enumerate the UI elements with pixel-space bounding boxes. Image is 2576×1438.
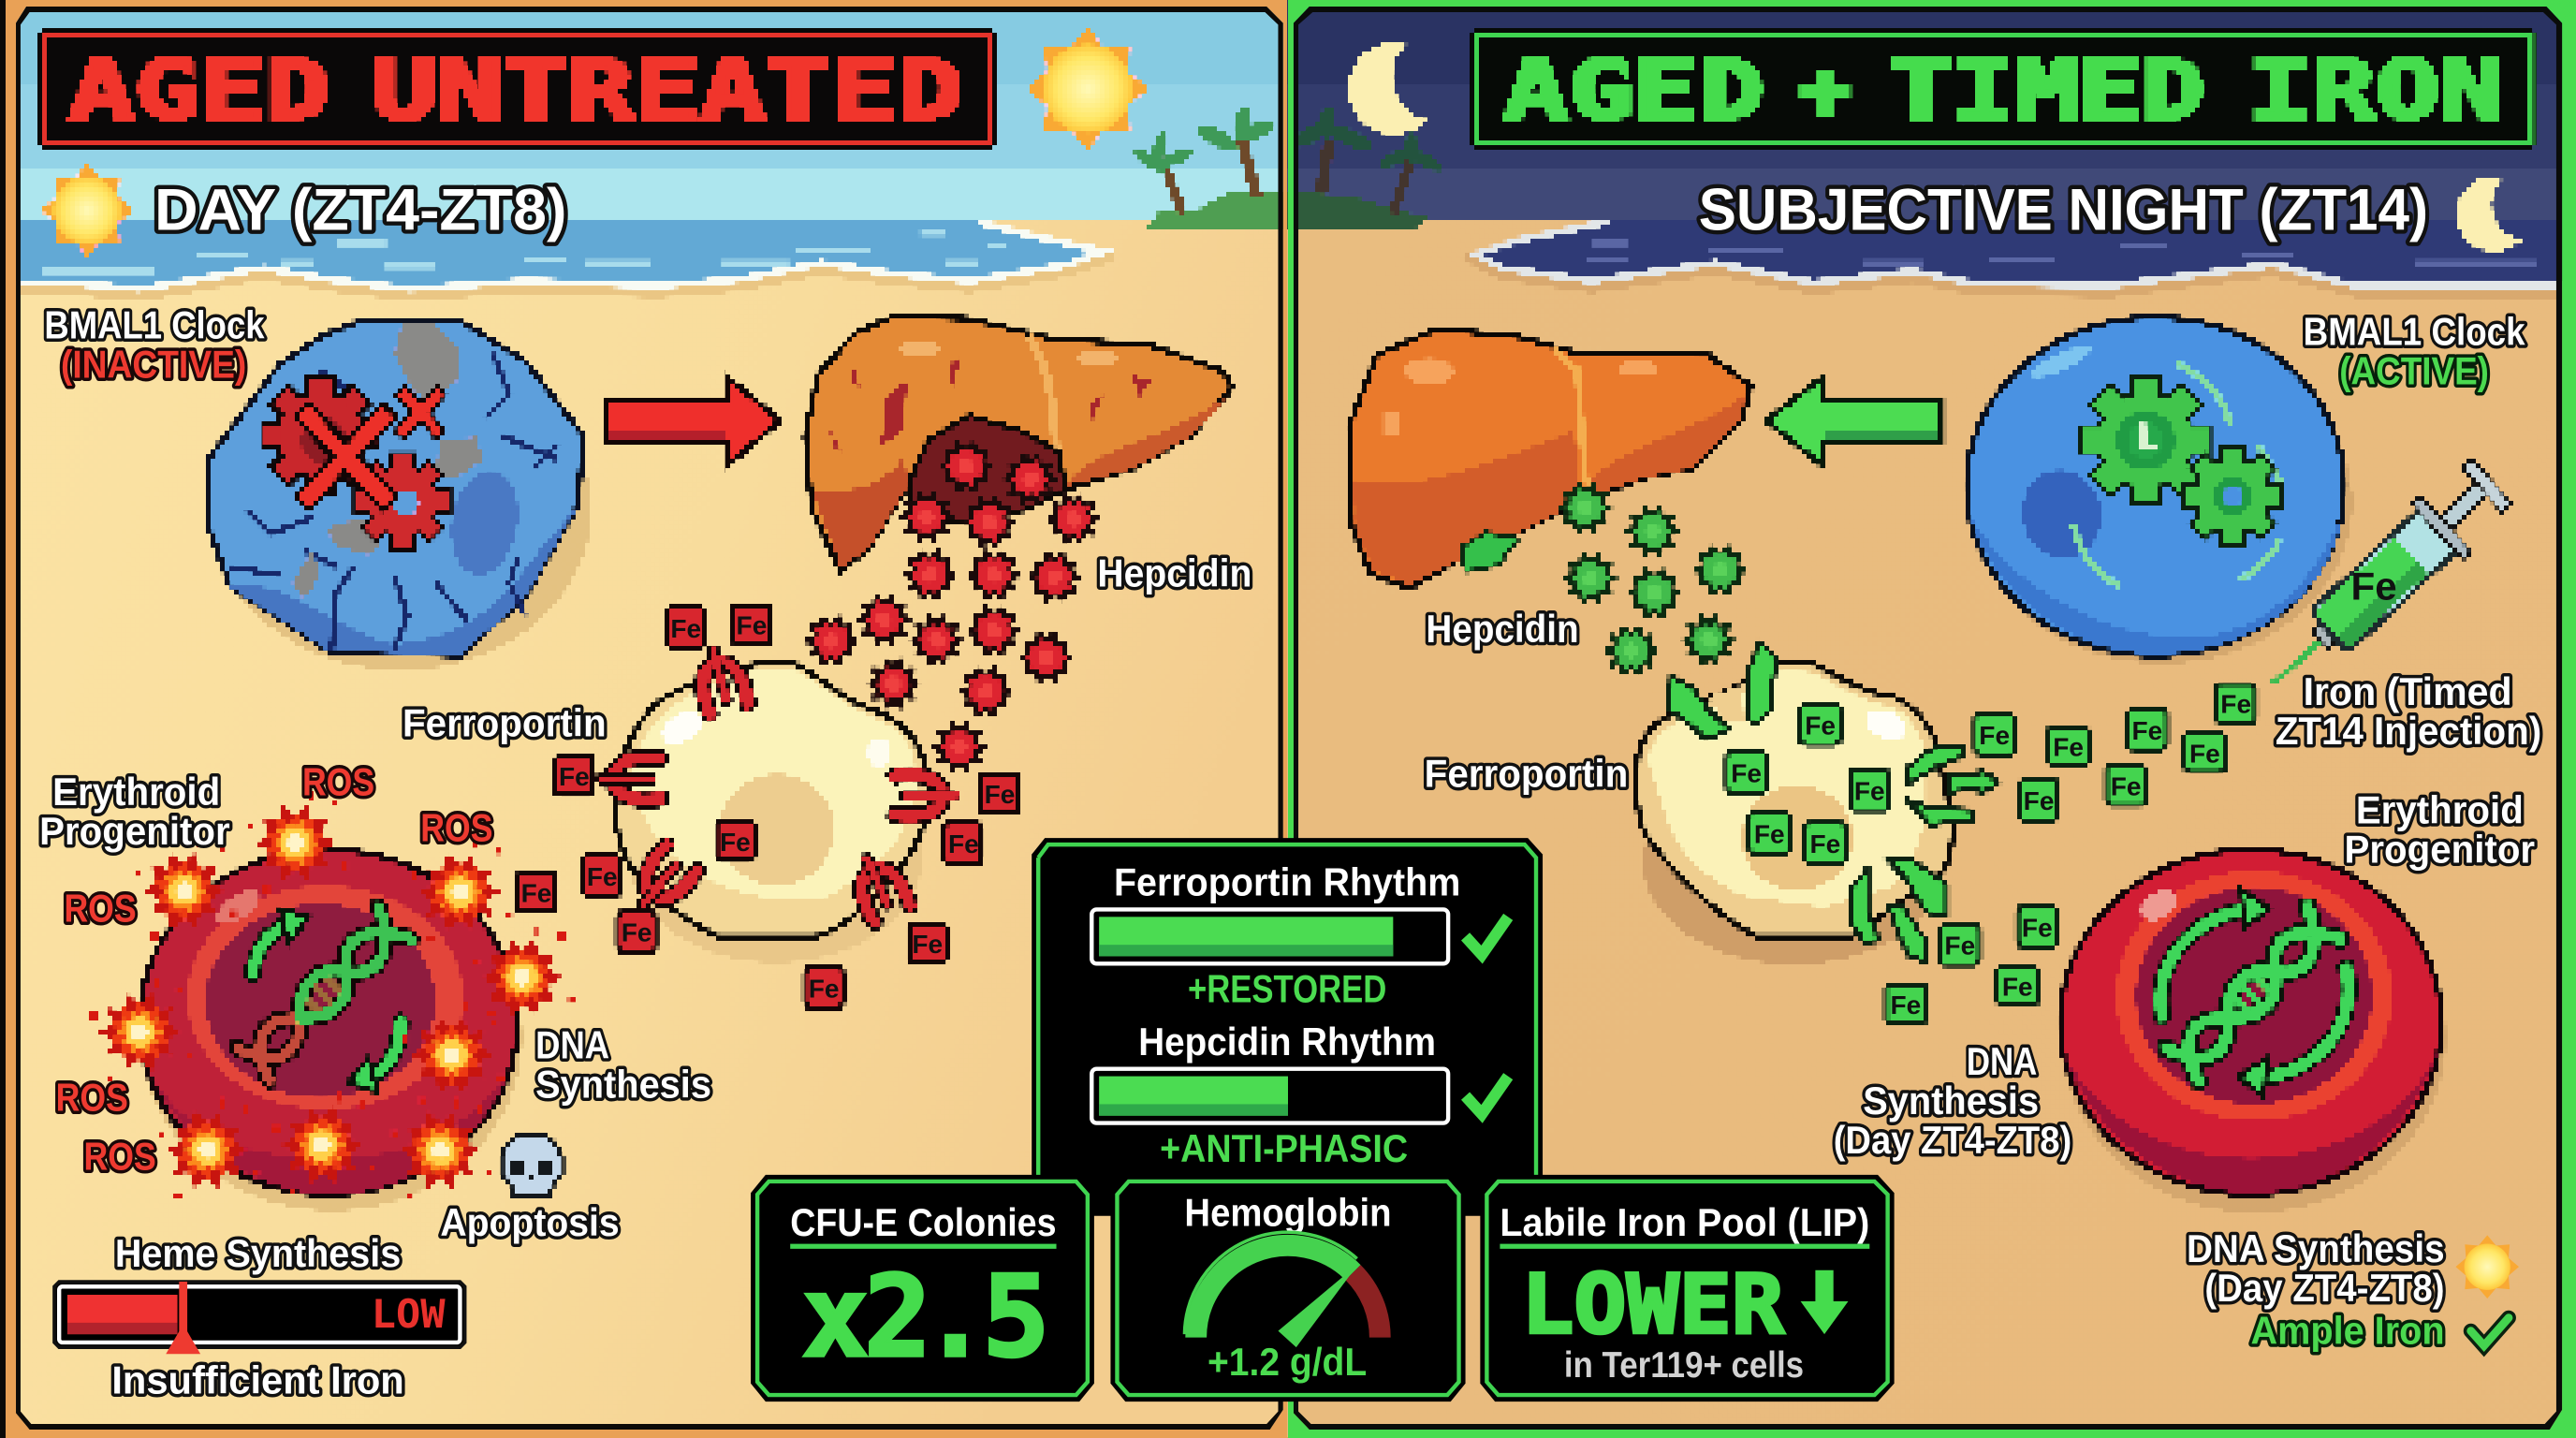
iron injection label: [2276, 669, 2541, 753]
iron labels: red tiles: Fe: [670, 614, 701, 643]
left panel illustration layer: [0, 0, 1288, 1438]
iron labels: green tiles: Fe: [1754, 819, 1785, 848]
BMAL1 clock label active: [2304, 310, 2525, 393]
iron labels: red tiles: Fe: [559, 762, 590, 791]
erythroid progenitor label: Erythroid: [52, 770, 220, 814]
iron labels: green tiles: Fe: [2111, 771, 2141, 800]
DNA synthesis label: Synthesis: [535, 1062, 711, 1106]
iron labels: green tiles: Fe: [2024, 786, 2054, 815]
erythroid progenitor label: Progenitor: [2345, 827, 2535, 871]
erythroid progenitor label: Erythroid: [2356, 787, 2524, 831]
ocean night: [1475, 222, 2576, 286]
ROS labels: ROS: [56, 1075, 128, 1119]
island with palm trees: [1131, 106, 1288, 230]
card: hemoglobin: [1110, 1175, 1466, 1401]
iron labels: red tiles: [521, 610, 1015, 1003]
broken gears: [264, 379, 448, 547]
night sky: [1288, 0, 2576, 222]
anti-phasic label: +ANTI-PHASIC: [1160, 1126, 1408, 1170]
icon: cycle arrows right: [2160, 889, 2349, 1097]
BMAL1 clock label: [44, 303, 265, 387]
title: aged untreated: AGED: [69, 42, 330, 138]
insufficient iron label: Insufficient Iron: [111, 1357, 404, 1401]
hepcidin molecules: green: [1560, 484, 1745, 674]
icon: large sun: [1027, 28, 1149, 150]
active gears: [2084, 378, 2281, 545]
ferroportin label: Ferroportin: [402, 700, 607, 744]
DNA synthesis day label: [1834, 1039, 2071, 1162]
icon: damaged DNA: [237, 906, 411, 1080]
ROS bursts: [91, 790, 575, 1199]
night island with palms: [1288, 107, 1445, 230]
icon: check ample iron: [2471, 1318, 2509, 1345]
ferroportin rhythm bar: [1091, 909, 1448, 963]
ocean left: [0, 222, 1104, 289]
ROS labels: ROS: [84, 1135, 156, 1179]
DNA synthesis label: [535, 1022, 711, 1106]
erythroid progenitor label: [2345, 787, 2535, 871]
water ripples left: [41, 233, 1005, 271]
title: aged + timed iron: [1471, 30, 2539, 148]
iron tiles: green: [1727, 683, 2256, 1023]
iron labels: green tiles: Fe: [2053, 732, 2084, 761]
card: labile iron pool: in Ter119+ cells: [1564, 1345, 1804, 1386]
card: CFU-E colonies: CFU-E Colonies: [790, 1200, 1057, 1244]
DNA synthesis day label: (Day ZT4-ZT8): [1834, 1118, 2071, 1162]
check mark: [1466, 917, 1508, 955]
arrow: cell to liver: [607, 376, 781, 466]
iron injection label: Iron (Timed: [2304, 669, 2512, 713]
panel: rhythm summary: [1032, 838, 1543, 1216]
title: aged + timed iron: AGED: [1503, 42, 1764, 138]
sand background left: [0, 0, 1288, 1438]
title: aged + timed iron: TIMED: [1889, 42, 2204, 138]
hepcidin molecules: red: [807, 443, 1097, 771]
icon: cracked blue cell with broken gears: [209, 320, 583, 655]
check mark: [1466, 1077, 1508, 1114]
heme synthesis bar: [54, 1282, 465, 1354]
card: labile iron pool: LOWER: [1521, 1256, 1784, 1352]
icon: macrophage untreated: [614, 664, 929, 962]
iron labels: green tiles: Fe: [2189, 739, 2220, 768]
DNA synthesis day label: DNA: [1967, 1039, 2037, 1083]
BMAL1 clock label active: (ACTIVE): [2339, 349, 2489, 393]
icon: healthy erythroid cell: [2060, 849, 2446, 1212]
sky left: [0, 0, 1288, 222]
shoreline night: [1466, 255, 2576, 292]
BMAL1 clock label: (INACTIVE): [61, 343, 246, 387]
hepcidin label: Hepcidin: [1097, 551, 1251, 595]
iron labels: red tiles: Fe: [720, 828, 751, 857]
icon: syringe: [2248, 453, 2517, 712]
iron labels: green tiles: Fe: [2132, 716, 2162, 745]
DNA synthesis day label: Synthesis: [1863, 1078, 2039, 1123]
foam night: [1475, 222, 2576, 286]
icon: green cycle arrows left: [253, 909, 401, 1093]
iron labels: green tiles: Fe: [1944, 932, 1975, 961]
blue cell shadow: [1971, 342, 2352, 664]
sand background right: [1288, 0, 2576, 1438]
icon: damaged liver: [805, 315, 1232, 572]
iron labels: green tiles: Fe: [2022, 913, 2053, 942]
erythroid progenitor label: [39, 770, 230, 853]
arrow: down: [1801, 1270, 1848, 1334]
iron labels: green tiles: [1731, 690, 2251, 1020]
iron labels: red tiles: Fe: [521, 879, 551, 908]
iron labels: green tiles: Fe: [1854, 777, 1885, 806]
DNA synthesis callout: (Day ZT4-ZT8): [2204, 1266, 2445, 1310]
right panel frame: [1288, 0, 2576, 1438]
DNA synthesis callout: Ample Iron: [2250, 1309, 2445, 1353]
iron tiles: red: [518, 605, 1018, 1007]
left panel labels and frame layer: [0, 0, 1288, 1438]
card: hemoglobin: Hemoglobin: [1184, 1190, 1392, 1234]
red crosses: [309, 394, 437, 496]
iron labels: red tiles: Fe: [587, 862, 618, 891]
right panel illustration layer: [1288, 0, 2576, 1438]
iron injection label: ZT14 Injection): [2276, 709, 2541, 753]
left panel frame: [0, 0, 1288, 1438]
card: CFU-E colonies: x2.5: [801, 1253, 1049, 1383]
title: aged + timed iron: +: [1799, 42, 1852, 138]
iron labels: red tiles: Fe: [948, 829, 979, 858]
grey smoke: [292, 322, 483, 600]
iron labels: green tiles: Fe: [1979, 721, 2010, 750]
icon: large moon: [1348, 43, 1427, 135]
ferroportin channels open: [1669, 640, 1999, 961]
card: labile iron pool: Labile Iron Pool (LIP): [1500, 1200, 1869, 1244]
ROS labels: [56, 759, 493, 1179]
right panel labels and frame layer: [1288, 0, 2576, 1438]
BMAL1 clock label active: BMAL1 Clock: [2304, 310, 2525, 354]
ferroportin rhythm heading: Ferroportin Rhythm: [1114, 860, 1460, 904]
foam left: [0, 222, 1104, 289]
icon: small sun: [41, 164, 133, 257]
iron labels: green tiles: Fe: [1731, 758, 1762, 787]
card: CFU-E colonies: [751, 1175, 1094, 1401]
ferroportin channels blocked: [601, 647, 955, 922]
night label: SUBJECTIVE NIGHT (ZT14): [1699, 178, 2428, 243]
hepcidin rhythm heading: Hepcidin Rhythm: [1138, 1020, 1436, 1064]
card: hemoglobin: +1.2 g/dL: [1208, 1340, 1367, 1384]
iron labels: green tiles: Fe: [2002, 973, 2033, 1002]
title: aged + timed iron: IRON: [2247, 42, 2504, 138]
icon: healthy liver: [1349, 329, 1751, 588]
iron labels: red tiles: Fe: [985, 780, 1015, 809]
arrow: cell to liver: [1766, 376, 1942, 466]
icon: small day sun: [2455, 1235, 2519, 1299]
ROS labels: ROS: [302, 759, 374, 803]
restored label: +RESTORED: [1188, 967, 1386, 1011]
icon: damaged erythroid cell: [139, 849, 522, 1211]
iron labels: green tiles: Fe: [1891, 990, 1921, 1020]
iron labels: green tiles: Fe: [2220, 690, 2251, 719]
day label: DAY (ZT4-ZT8): [154, 178, 567, 243]
panel: aged + timed iron: [1288, 0, 2576, 1438]
iron labels: green tiles: Fe: [1810, 829, 1840, 858]
iron labels: red tiles: Fe: [912, 930, 943, 959]
water ripples night: [1586, 243, 2539, 263]
hepcidin rhythm bar: [1091, 1069, 1448, 1123]
cracked cell shadow: [211, 348, 592, 670]
shoreline left: [0, 255, 1114, 296]
icon: small moon: [2456, 176, 2522, 252]
panel: aged untreated: [0, 0, 1288, 1438]
dashboard cards: [751, 838, 1895, 1401]
hepcidin label: Hepcidin: [1426, 607, 1579, 651]
iron labels: red tiles: Fe: [622, 918, 651, 947]
iron labels: red tiles: Fe: [737, 610, 767, 639]
erythroid progenitor label: Progenitor: [39, 809, 230, 853]
ROS labels: ROS: [64, 887, 137, 931]
title: aged untreated: UNTREATED: [372, 42, 962, 138]
iron labels: red tiles: Fe: [809, 974, 840, 1003]
icon: macrophage treated: [1636, 662, 1954, 964]
ROS labels: ROS: [420, 806, 493, 850]
icon: skull: [501, 1136, 562, 1196]
syringe iron label: Fe: [2351, 565, 2397, 609]
DNA synthesis callout: DNA Synthesis: [2187, 1226, 2445, 1270]
card: labile iron pool: [1480, 1175, 1895, 1401]
heme synthesis bar: LOW: [372, 1291, 446, 1337]
DNA synthesis label: DNA: [535, 1022, 609, 1066]
heme synthesis label: Heme Synthesis: [115, 1231, 401, 1275]
title: aged untreated: [37, 30, 996, 148]
DNA synthesis callout: [2187, 1226, 2445, 1353]
BMAL1 clock label: BMAL1 Clock: [44, 303, 265, 347]
gauge: [1184, 1232, 1380, 1347]
icon: healthy DNA: [2166, 906, 2340, 1080]
icon: healthy blue cell with active gears: [1967, 317, 2345, 655]
ferroportin label: Ferroportin: [1425, 752, 1628, 796]
iron labels: green tiles: Fe: [1805, 712, 1836, 741]
apoptosis label: Apoptosis: [440, 1200, 620, 1244]
